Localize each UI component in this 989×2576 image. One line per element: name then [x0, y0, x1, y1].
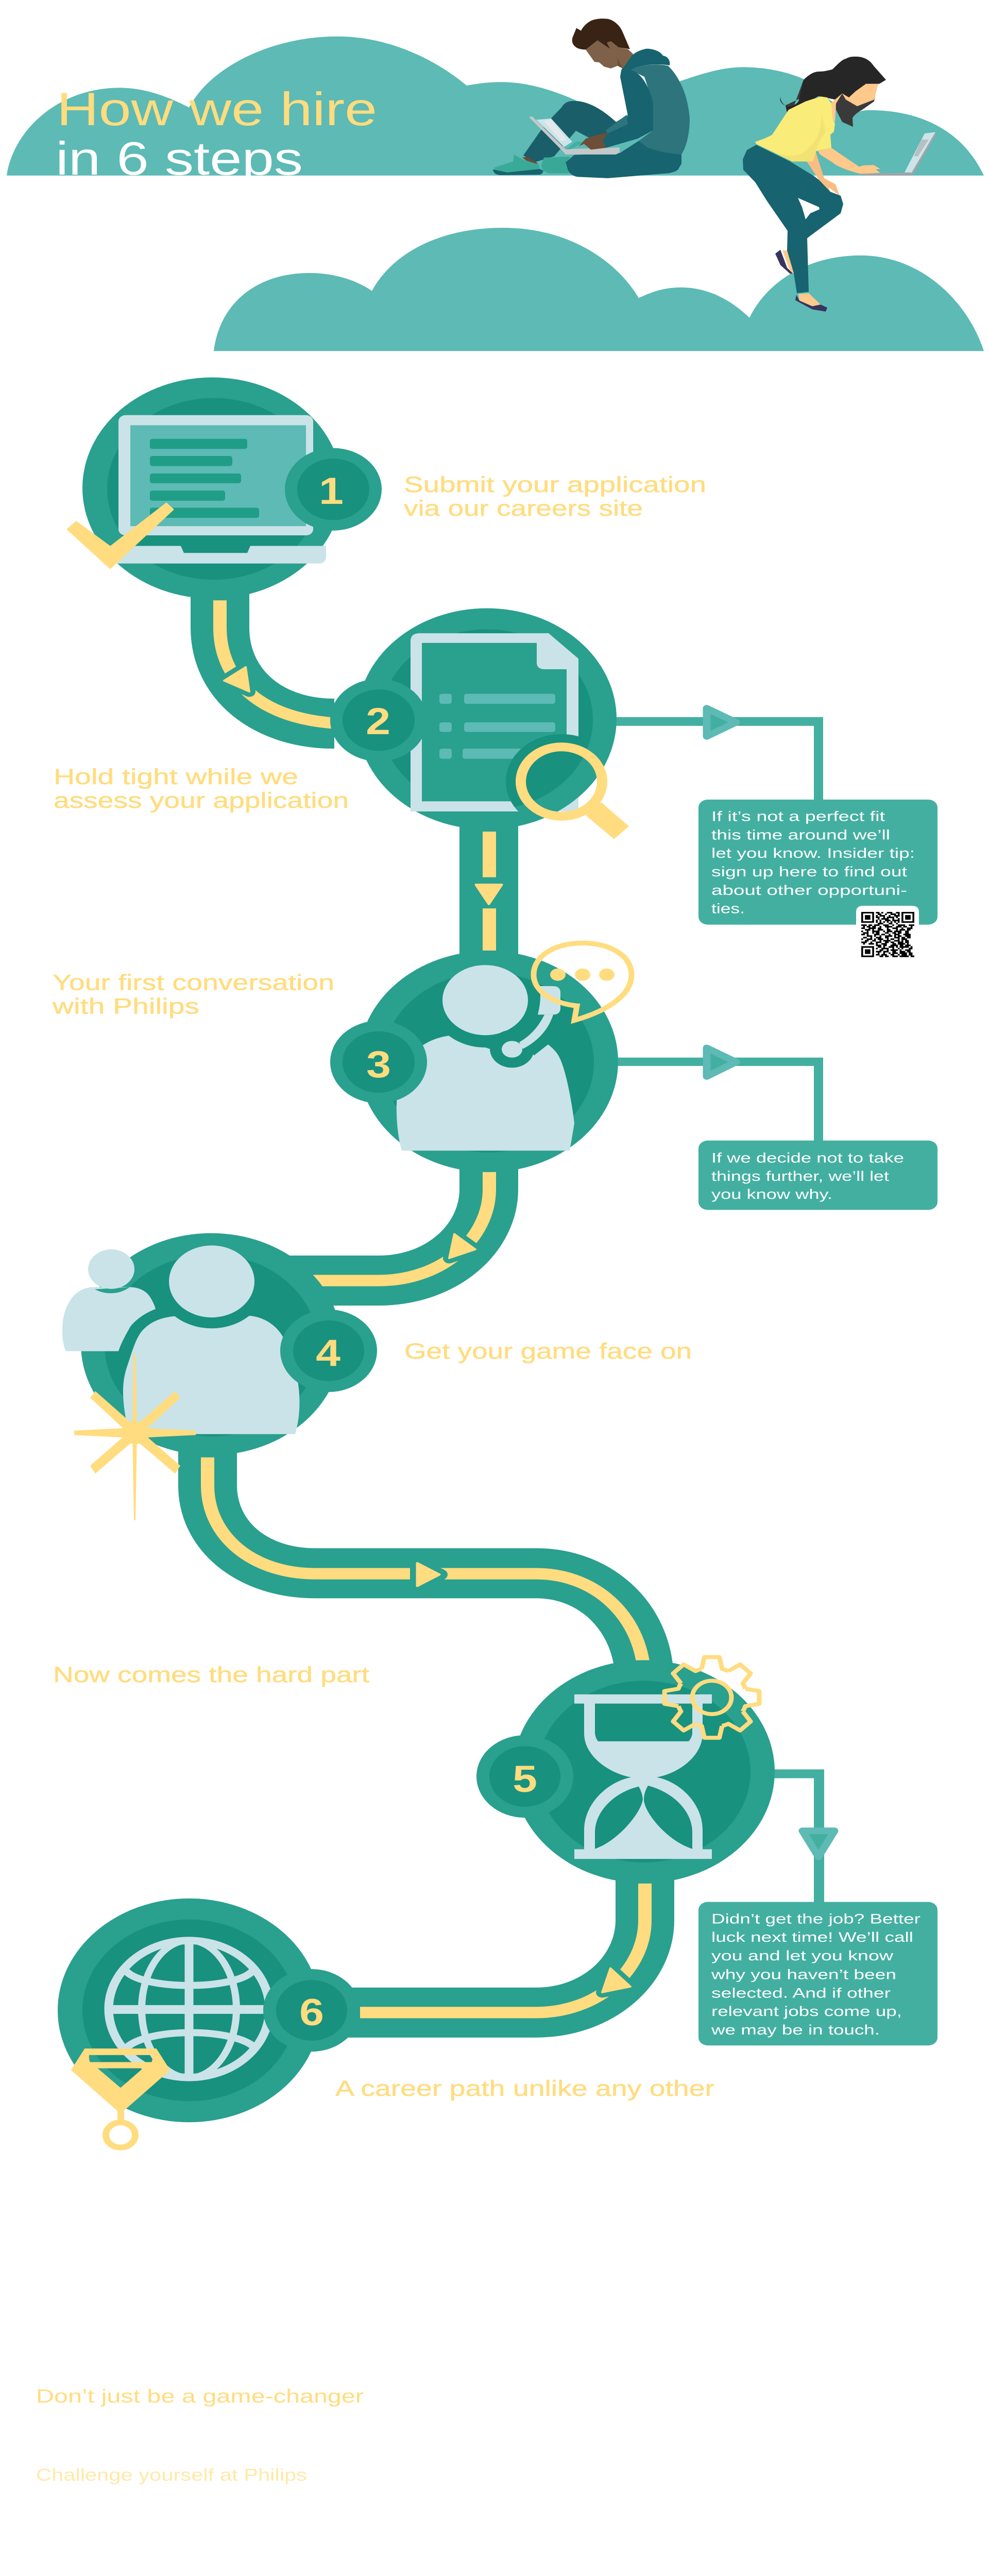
step 2 label — [54, 765, 349, 812]
step 5 label: Now comes the hard part — [53, 1662, 369, 1687]
step 3 label — [52, 970, 334, 1019]
callout: not a perfect fit: ties. — [711, 901, 745, 917]
title — [56, 83, 377, 185]
step 1 label: Submit your application — [404, 472, 706, 497]
callout: didn't get the job: selected. And if other — [711, 1985, 891, 2001]
step 3 label: with Philips — [52, 994, 199, 1019]
number badge 3 — [330, 1021, 427, 1103]
panel: step 4 — [62, 1233, 377, 1520]
number badge 1 — [285, 448, 382, 531]
closing subline: Challenge yourself at Philips — [36, 2465, 307, 2484]
connector: step 5 to note — [768, 1769, 834, 1903]
callout: didn't get the job: Didn’t get the job? Better — [711, 1911, 920, 1927]
icon: check mark — [66, 502, 174, 569]
pipe: step 1 to 2 — [220, 588, 350, 724]
illustration: man with laptop — [493, 19, 690, 178]
callout: not a perfect fit: let you know. Insider tip: — [711, 845, 915, 861]
number badge 4 — [280, 1310, 377, 1392]
step 1 label: via our careers site — [404, 496, 643, 520]
pipe: step 3 to 4 — [288, 1163, 489, 1281]
number badge 4: 4 — [316, 1332, 340, 1374]
callout: not taking further: If we decide not to take — [711, 1150, 904, 1166]
number badge 3: 3 — [366, 1043, 391, 1086]
number badge 1: 1 — [319, 470, 344, 512]
QR code — [856, 906, 919, 961]
pipe: step 5 to 6 — [330, 1874, 645, 2012]
connector: step 3 to note — [613, 1048, 823, 1141]
number badge 5: 5 — [513, 1758, 537, 1800]
callout: didn't get the job — [698, 1902, 937, 2045]
illustration: woman with laptop — [743, 57, 936, 312]
callout: not a perfect fit — [698, 800, 937, 925]
pipe: step 2 to 3 — [459, 816, 518, 961]
panel: step 2 — [330, 608, 629, 839]
icon: hourglass — [574, 1694, 712, 1859]
icon: globe — [108, 1940, 270, 2078]
icon: small person — [62, 1249, 156, 1351]
icon: gear — [664, 1657, 759, 1738]
step 4 label: Get your game face on — [404, 1339, 692, 1363]
icon: large person — [123, 1234, 299, 1434]
step 1 label — [404, 472, 706, 520]
step 2 label: Hold tight while we — [54, 765, 298, 789]
number badge 6 — [263, 1969, 360, 2052]
number badge 5 — [476, 1735, 573, 1818]
callout: didn't get the job: you and let you know — [711, 1948, 894, 1963]
header clouds — [7, 37, 984, 351]
connector: step 2 to note — [613, 708, 823, 800]
icon: sparkle — [74, 1354, 196, 1520]
number badge 6: 6 — [299, 1991, 324, 2033]
title: How we hire — [57, 83, 377, 135]
icon: laptop — [116, 415, 326, 564]
icon: agent with headset — [397, 953, 574, 1150]
step 2 label: assess your application — [54, 788, 349, 812]
icon: document — [411, 633, 578, 811]
number badge 2 — [330, 679, 427, 761]
panel: step 1 — [66, 378, 382, 599]
panel: step 5 — [476, 1657, 775, 1883]
step 6 label: A career path unlike any other — [335, 2076, 714, 2100]
step 3 label: Your first conversation — [53, 970, 334, 995]
closing headline: Don’t just be a game-changer — [36, 2385, 364, 2407]
callout: didn't get the job: we may be in touch. — [711, 2022, 880, 2038]
icon: magnifier — [506, 734, 629, 839]
panel: step 6 — [58, 1899, 360, 2147]
panel: step 3 — [330, 943, 632, 1172]
callout: not taking further: things further, we’ll let — [711, 1168, 890, 1184]
callout: didn't get the job: relevant jobs come up, — [711, 2004, 902, 2020]
callout: not taking further — [698, 1141, 937, 1210]
title: in 6 steps — [56, 132, 303, 185]
callout: not a perfect fit: about other opportuni- — [711, 883, 907, 898]
callout: didn't get the job: luck next time! We’ll call — [711, 1929, 913, 1945]
callout: didn't get the job: why you haven’t been — [711, 1967, 896, 1982]
pipe: step 4 to 5 — [208, 1448, 644, 1681]
callout: not taking further: you know why. — [711, 1187, 832, 1202]
icon: speech bubble — [534, 943, 632, 1020]
number badge 2: 2 — [366, 700, 390, 742]
icon: diamond pendant — [72, 2049, 169, 2147]
callout: not a perfect fit: this time around we’ll — [711, 827, 890, 843]
callout: not a perfect fit: sign up here to find out — [711, 864, 908, 879]
callout: not a perfect fit: If it’s not a perfect fit — [711, 809, 885, 824]
